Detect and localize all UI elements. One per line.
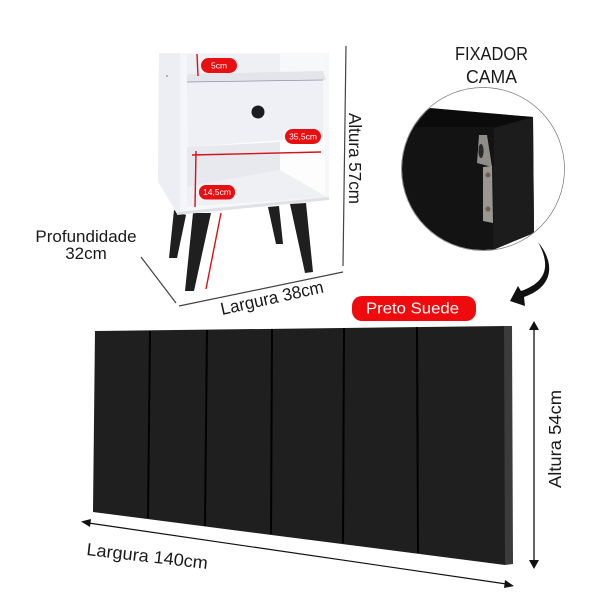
text: FIXADOR CAMA: FIXADOR [455,43,528,64]
dimension line: nightstand depth [141,257,176,303]
dimension arrow: headboard height [529,321,539,569]
panel seams [148,327,418,553]
label: 35,5cm [285,129,321,144]
nightstand illustration [158,53,329,291]
dimension line: nightstand height [343,46,346,266]
headboard corner [402,108,534,250]
headboard panels [93,326,506,565]
nightstand body [158,53,329,215]
nightstand legs [169,203,313,291]
text: Profundidade 32cm: Profundidade [35,227,137,246]
text: Altura 57cm: Altura 57cm [345,113,365,204]
text: FIXADOR CAMA [455,43,528,87]
label: 14,5cm [199,185,235,200]
metal bracket [477,135,493,223]
text: Largura 38cm: Largura 38cm [219,277,325,319]
label: 5cm: 5cm [211,60,227,70]
text: Altura 54cm: Altura 54cm [545,390,565,488]
label: Preto Suede [352,296,476,321]
text: Largura 140cm: Largura 140cm [86,539,209,573]
text: Profundidade 32cm: 32cm [65,244,107,263]
headboard [93,326,513,565]
label: 35,5cm: 35,5cm [289,132,317,142]
headboard side edge [504,326,513,565]
text: FIXADOR CAMA: CAMA [466,66,518,87]
dimension arrow: headboard width [81,519,514,588]
drawer knob [252,106,264,118]
drawer [187,80,323,147]
red measure lines [192,54,321,289]
label: Preto Suede: Preto Suede [366,300,459,318]
label: 14,5cm: 14,5cm [203,187,231,197]
label: 5cm [201,58,237,73]
dimension line: nightstand width [179,272,343,306]
curved arrow [510,242,549,306]
detail circle: mounting bracket [401,87,565,251]
